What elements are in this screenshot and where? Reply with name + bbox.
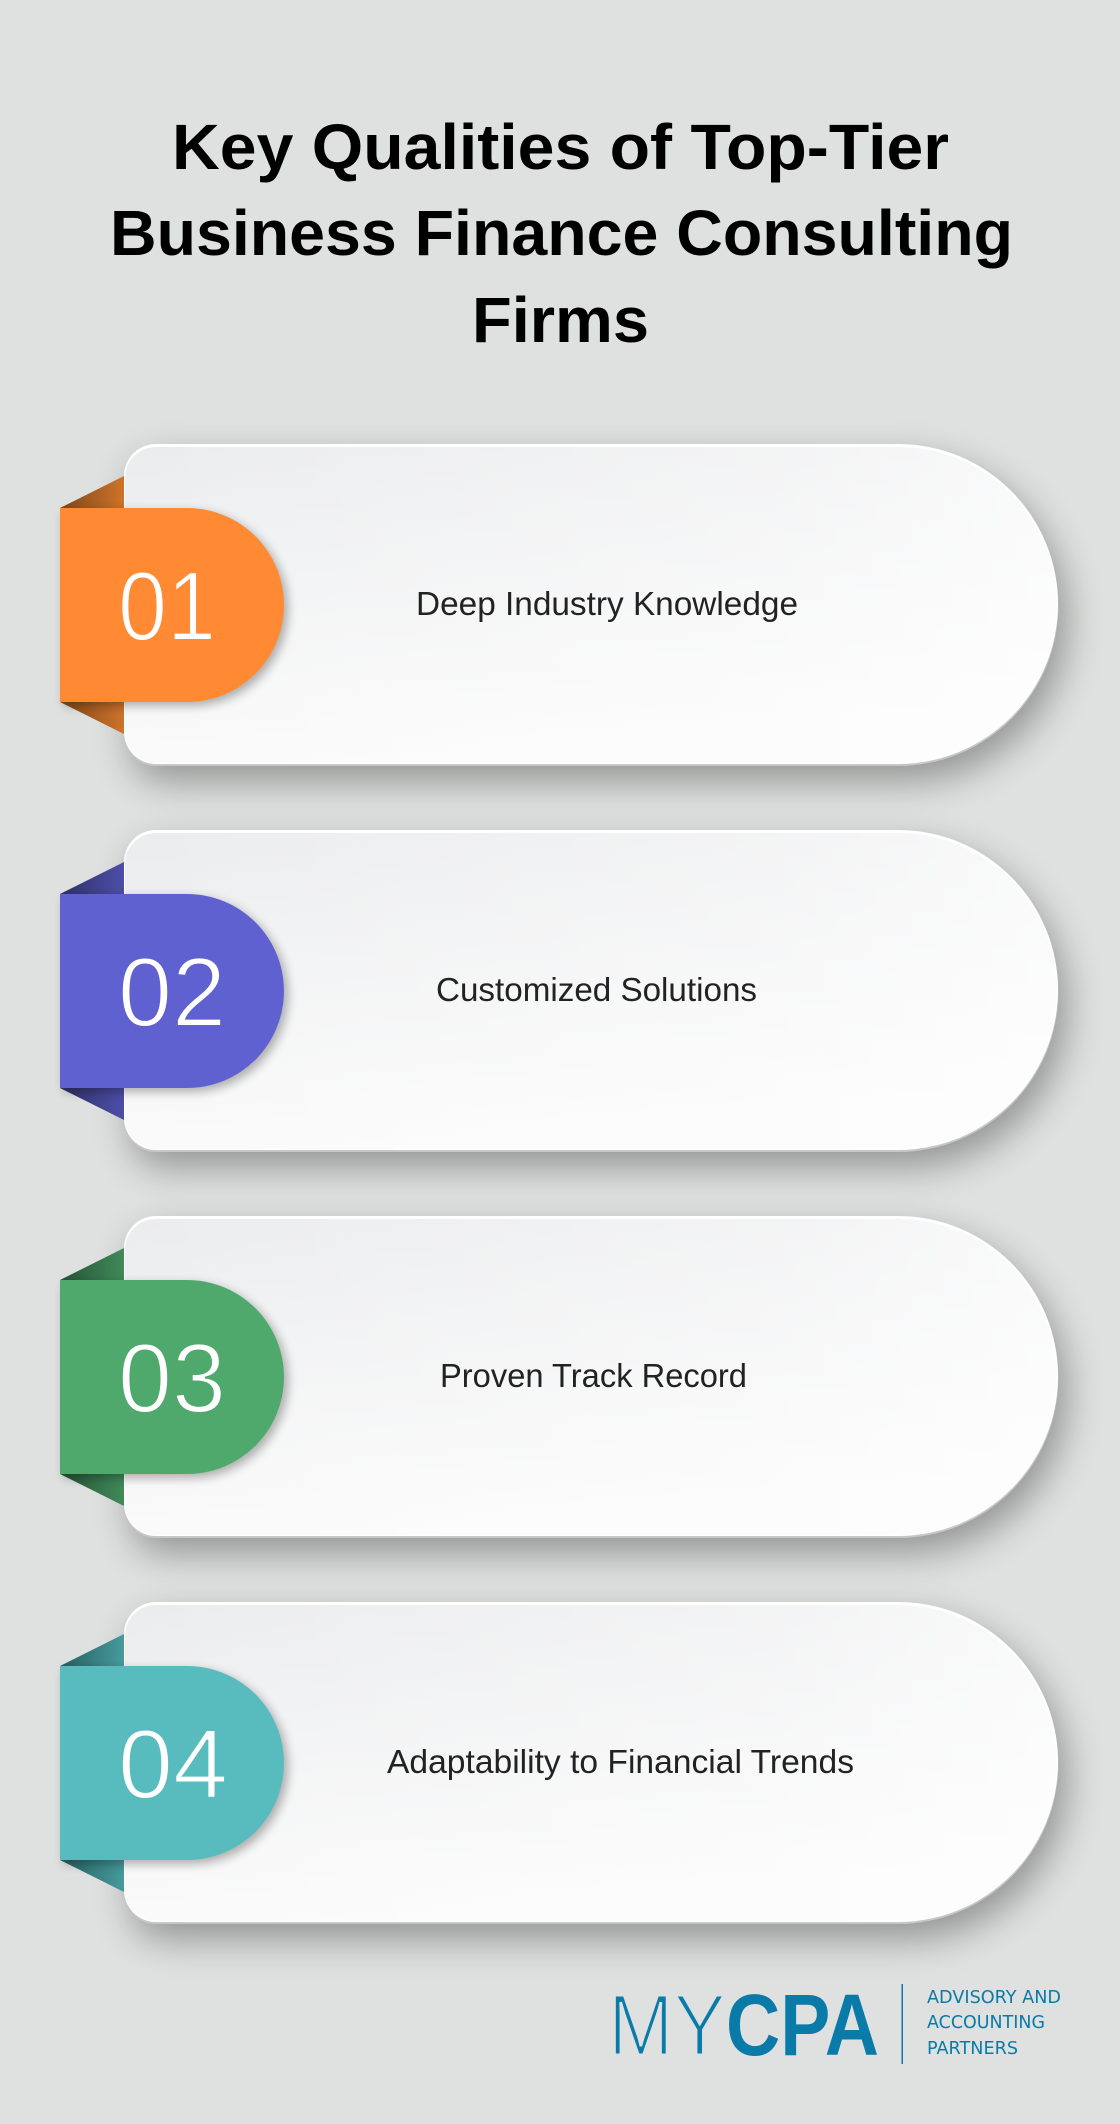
badge shadow xyxy=(64,1670,288,1864)
logo tagline xyxy=(927,1987,1061,2059)
card shadow xyxy=(132,1618,1066,1939)
fold wings xyxy=(60,1248,124,1506)
fold wings xyxy=(60,862,124,1120)
card shadow xyxy=(132,1232,1066,1553)
logo wordmark xyxy=(608,1977,879,2074)
logo tagline: PARTNERS xyxy=(927,2038,1018,2059)
logo wordmark: MY xyxy=(608,1977,726,2074)
number: 04 xyxy=(118,1709,228,1819)
badge xyxy=(60,894,284,1088)
card shadow xyxy=(132,846,1066,1167)
logo: MYCPA advisory and accounting partners xyxy=(608,1977,1061,2074)
label: Deep Industry Knowledge xyxy=(416,585,798,622)
logo tagline: ACCOUNTING xyxy=(927,2012,1045,2033)
card xyxy=(124,1602,1058,1924)
label: Proven Track Record xyxy=(440,1357,747,1394)
logo wordmark: CPA xyxy=(726,1977,879,2074)
panel: item 02 Customized Solutions xyxy=(60,830,1066,1167)
card xyxy=(124,830,1058,1152)
fold wings xyxy=(60,1634,124,1892)
logo divider xyxy=(902,1984,903,2064)
title xyxy=(110,111,1013,356)
badge shadow xyxy=(64,1284,288,1478)
title: Firms xyxy=(472,284,649,356)
number: 02 xyxy=(118,937,226,1047)
badge xyxy=(60,1280,284,1474)
number: 03 xyxy=(118,1323,226,1433)
card xyxy=(124,1216,1058,1538)
title: Key Qualities of Top-Tier xyxy=(172,111,949,183)
panel: item 01 Deep Industry Knowledge xyxy=(60,444,1066,781)
badge shadow xyxy=(64,898,288,1092)
label: Customized Solutions xyxy=(436,971,757,1008)
title: Business Finance Consulting xyxy=(110,197,1013,269)
badge xyxy=(60,508,284,702)
panel: item 03 Proven Track Record xyxy=(60,1216,1066,1553)
badge shadow xyxy=(64,512,288,706)
card xyxy=(124,444,1058,766)
card shadow xyxy=(132,460,1066,781)
badge xyxy=(60,1666,284,1860)
fold wings xyxy=(60,476,124,734)
label: Adaptability to Financial Trends xyxy=(387,1743,854,1780)
logo tagline: ADVISORY AND xyxy=(927,1987,1061,2008)
number: 01 xyxy=(118,551,216,661)
panel: item 04 Adaptability to Financial Trends xyxy=(60,1602,1066,1939)
